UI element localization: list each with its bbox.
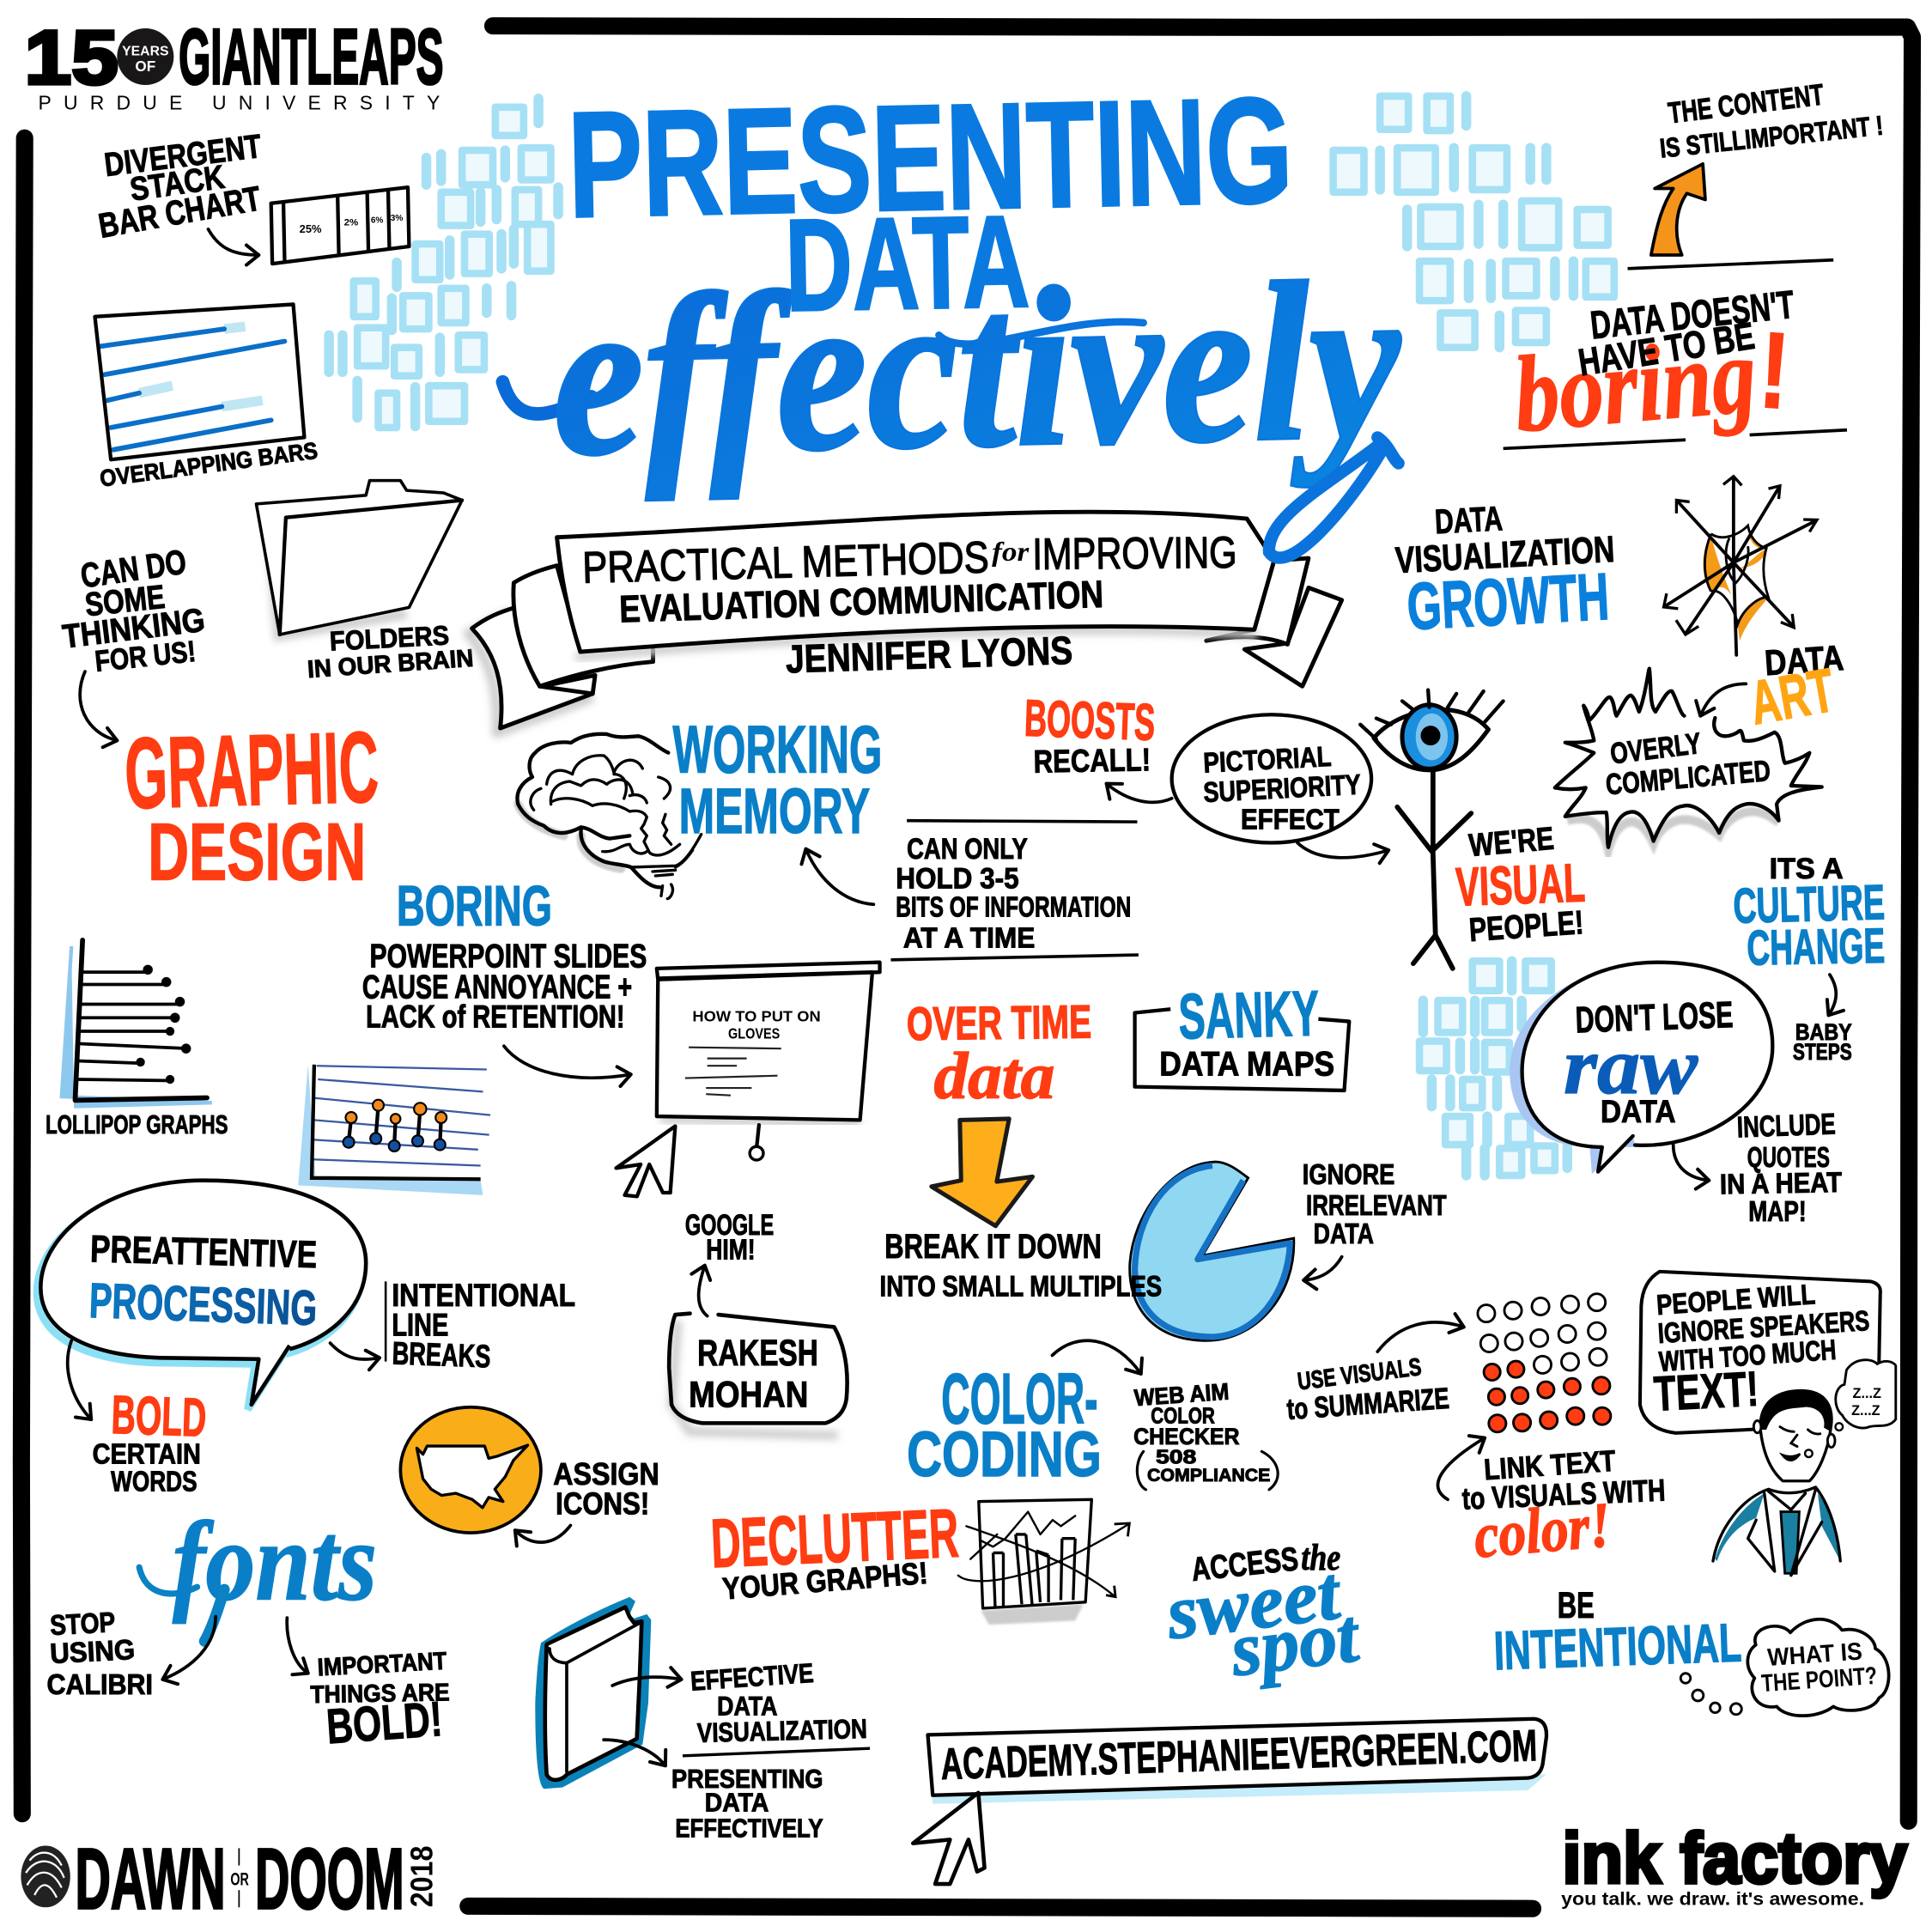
intentional line breaks: INTENTIONAL (392, 1277, 575, 1313)
boring powerpoint slides text (362, 874, 647, 1035)
we're visual people: WE'RE (1467, 820, 1555, 863)
stacked bar chart icon: 2% (344, 218, 358, 228)
pictorial superiority effect bubble: EFFECT (1241, 804, 1340, 835)
people will ignore speakers speech box: IGNORE SPEAKERS (1657, 1304, 1870, 1349)
folders in our brain label: FOLDERS (329, 619, 450, 657)
title: presenting data: DATA (784, 189, 1030, 339)
boring powerpoint slides text: CAUSE ANNOYANCE + (362, 969, 632, 1005)
overly complicated burst: COMPLICATED (1605, 755, 1771, 802)
logo: 150 years of giant leaps (25, 14, 444, 114)
working memory heading: MEMORY (679, 775, 870, 847)
divergent stack bar chart label: STACK (128, 159, 227, 209)
arrow to bold (68, 1340, 91, 1419)
access the sweet spot: sweet (1162, 1551, 1346, 1656)
cluttered graph icon (958, 1499, 1129, 1625)
use visuals to summarize: USE VISUALS (1296, 1353, 1423, 1396)
data doesn't have to be boring: boring (1510, 314, 1760, 455)
data doesn't have to be boring: DATA DOESN'T (1589, 282, 1796, 348)
color-coding heading: COLOR- (941, 1358, 1098, 1438)
baby steps (1793, 1018, 1852, 1065)
important things are bold: BOLD! (325, 1692, 444, 1754)
logo: dawn or doom 2018: DAWN (76, 1832, 226, 1928)
overlapping bars chart (94, 304, 304, 459)
overlapping bars label: OVERLAPPING BARS (98, 437, 319, 492)
book illustration (535, 1597, 651, 1789)
ribbon banner: EVALUATION COMMUNICATION (619, 574, 1104, 631)
break it down text: BREAK IT DOWN (884, 1227, 1102, 1266)
arrow to recall (1107, 784, 1172, 802)
arrow to calibri (162, 1617, 216, 1680)
overly complicated burst: OVERLY (1608, 727, 1703, 771)
include quotes in a heat map: MAP! (1748, 1195, 1807, 1227)
can only hold 3-5 text block (890, 821, 1139, 960)
book titles: VISUALIZATION (696, 1713, 867, 1748)
access the sweet spot: the (1301, 1538, 1340, 1578)
stop using calibri: USING (49, 1633, 136, 1669)
divergent stack bar chart label (95, 128, 264, 246)
what is the point thought cloud: THE POINT? (1760, 1662, 1878, 1698)
culture change (1733, 853, 1886, 976)
arrow to important things (287, 1618, 308, 1674)
web aim color checker: CHECKER (1133, 1423, 1240, 1449)
working memory heading (672, 714, 882, 847)
google him: HIM! (706, 1234, 756, 1266)
book titles: PRESENTING (671, 1765, 823, 1794)
data visualization growth: GROWTH (1406, 560, 1611, 644)
dot grid (1478, 1294, 1611, 1432)
overly complicated burst (1555, 669, 1822, 849)
use visuals to summarize: to SUMMARIZE (1285, 1382, 1450, 1426)
declutter your graphs: DECLUTTER (709, 1495, 960, 1583)
book titles: EFFECTIVE (690, 1657, 815, 1697)
can do some thinking for us (60, 543, 207, 678)
boosts recall: RECALL! (1033, 741, 1151, 780)
snoring thought cloud (1835, 1360, 1896, 1431)
boosts recall (1024, 689, 1156, 780)
link text to visuals with color (1461, 1445, 1666, 1572)
web aim color checker: WEB AIM (1133, 1378, 1230, 1411)
link text to visuals with color: LINK TEXT (1483, 1445, 1617, 1486)
lollipop graph (62, 940, 212, 1107)
arrow to usa icon (515, 1525, 570, 1542)
orange up arrow (1628, 164, 1833, 269)
pictorial superiority effect bubble: SUPERIORITY (1202, 769, 1362, 808)
website url box (928, 1719, 1546, 1804)
divergent stack bar chart label: BAR CHART (95, 179, 264, 246)
book titles (671, 1657, 870, 1844)
color-coding heading (907, 1358, 1102, 1490)
pictorial superiority effect bubble: PICTORIAL (1202, 740, 1332, 779)
arrow to graphic design (80, 671, 117, 740)
stacked bar chart icon: 25% (300, 222, 322, 235)
title: presenting data: PRESENTING (567, 67, 1294, 250)
logo: dawn or doom 2018: DOOM (255, 1832, 404, 1928)
arrow to working memory (805, 849, 873, 904)
folders in our brain label: IN OUR BRAIN (307, 645, 474, 683)
arrow to slide (504, 1046, 631, 1078)
include quotes in a heat map: INCLUDE (1736, 1108, 1836, 1144)
lollipop graphs label: LOLLIPOP GRAPHS (46, 1111, 228, 1139)
bold certain words: BOLD (111, 1385, 208, 1449)
logo: dawn or doom 2018: 2018 (405, 1846, 440, 1907)
use visuals to summarize (1285, 1353, 1450, 1426)
arrow to stacked bar (209, 229, 258, 255)
access the sweet spot: spot (1225, 1594, 1364, 1693)
important things are bold (310, 1648, 450, 1754)
website url box: ACADEMY.STEPHANIEEVERGREEN.COM (940, 1720, 1538, 1789)
folders in our brain label (307, 619, 474, 683)
can only hold 3-5 text block: AT A TIME (903, 921, 1035, 953)
can do some thinking for us: THINKING (60, 602, 207, 656)
intentional line breaks: LINE (392, 1306, 448, 1342)
arrow to include quotes (1674, 1145, 1709, 1181)
be intentional: INTENTIONAL (1493, 1613, 1742, 1681)
presentation screen with slide: HOW TO PUT ON (692, 1008, 821, 1025)
logo: 150 years of giant leaps: PURDUE UNIVERSITY (38, 92, 440, 114)
cursor pointing at url (913, 1793, 985, 1884)
rakesh mohan box: RAKESH (697, 1333, 818, 1374)
snoring thought cloud: Z...Z (1853, 1386, 1881, 1401)
logo: 150 years of giant leaps: OF (135, 58, 155, 75)
folder icon (256, 481, 462, 635)
preattentive processing speech bubble: PROCESSING (88, 1273, 318, 1336)
baby steps: STEPS (1793, 1038, 1852, 1065)
we're visual people: VISUAL (1455, 853, 1586, 918)
don't lose raw data bubble: DATA (1601, 1093, 1676, 1129)
the content is still important (1658, 79, 1885, 164)
bold certain words: WORDS (111, 1465, 197, 1497)
don't lose raw data bubble: DON'T LOSE (1575, 994, 1734, 1041)
ribbon banner: for (992, 537, 1030, 567)
pie chart (1130, 1162, 1294, 1340)
break it down text: INTO SMALL MULTIPLES (880, 1271, 1162, 1303)
logo: ink factory: ink factory (1563, 1819, 1907, 1899)
people will ignore speakers speech box: TEXT! (1652, 1362, 1760, 1422)
include quotes in a heat map (1720, 1108, 1842, 1227)
preattentive processing speech bubble (37, 1181, 366, 1410)
brain illustration (517, 734, 702, 899)
color-coding heading: CODING (907, 1418, 1102, 1490)
intentional line breaks (386, 1277, 575, 1374)
orange down arrow (932, 1119, 1032, 1226)
arrow to google him (699, 1266, 708, 1316)
speaker name: JENNIFER LYONS (785, 628, 1073, 681)
stop using calibri (47, 1606, 153, 1700)
what is the point thought cloud (1680, 1619, 1889, 1716)
logo: dawn or doom 2018 (21, 1832, 440, 1928)
can only hold 3-5 text block: CAN ONLY (907, 833, 1028, 866)
data art: ART (1745, 656, 1839, 738)
can only hold 3-5 text block: BITS OF INFORMATION (896, 891, 1131, 923)
arrow to web aim (1052, 1340, 1141, 1374)
link text to visuals with color: to VISUALS WITH (1461, 1473, 1666, 1516)
be intentional (1493, 1585, 1742, 1681)
ignore irrelevant data: IGNORE (1303, 1158, 1394, 1190)
declutter your graphs: YOUR GRAPHS! (721, 1556, 929, 1607)
break it down text (880, 1227, 1162, 1303)
logo: 150 years of giant leaps: YEARS (122, 45, 168, 59)
declutter your graphs (709, 1495, 960, 1607)
we're visual people (1455, 820, 1586, 949)
don't lose raw data bubble (1510, 963, 1772, 1174)
web aim color checker: COLOR (1151, 1404, 1215, 1428)
preattentive processing speech bubble: PREATTENTIVE (89, 1228, 318, 1276)
cursor pointing at slide (616, 1127, 675, 1196)
access the sweet spot (1162, 1538, 1364, 1693)
google him (685, 1209, 774, 1266)
ribbon banner: PRACTICAL METHODS (582, 532, 989, 592)
spider web icon (1664, 477, 1817, 655)
title: effectively script: effectively (550, 234, 1405, 503)
can do some thinking for us: CAN DO (78, 543, 189, 595)
logo: 150 years of giant leaps: GIANTLEAPS (179, 14, 444, 101)
stacked bar chart icon (271, 187, 409, 264)
sanky data maps box: DATA MAPS (1159, 1045, 1334, 1084)
divergent stack bar chart label: DIVERGENT (102, 128, 264, 184)
assign icons: ASSIGN (553, 1457, 659, 1492)
people will ignore speakers speech box (1640, 1272, 1880, 1433)
arrow to dot grid (1377, 1322, 1464, 1352)
the content is still important: THE CONTENT (1667, 79, 1826, 130)
presentation screen with slide (657, 963, 880, 1160)
arrow to presenting data effectively (604, 1740, 665, 1765)
arrow to line breaks (331, 1343, 380, 1359)
snoring thought cloud: Z...Z (1851, 1403, 1880, 1419)
boring powerpoint slides text: POWERPOINT SLIDES (369, 938, 647, 975)
rakesh mohan box: MOHAN (689, 1375, 808, 1416)
can do some thinking for us: FOR US! (94, 635, 197, 678)
fonts script heading: fonts (173, 1498, 377, 1625)
what is the point thought cloud: WHAT IS (1766, 1637, 1863, 1672)
logo: dawn or doom 2018: OR (230, 1868, 249, 1889)
logo: ink factory: you talk. we draw. it's awesome. (1561, 1888, 1864, 1909)
arrow to pie (1303, 1257, 1342, 1280)
people will ignore speakers speech box: PEOPLE WILL (1656, 1278, 1816, 1321)
logo: 150 years of giant leaps: 15 (25, 15, 118, 100)
sleeping man illustration (1713, 1391, 1840, 1576)
ignore irrelevant data: DATA (1314, 1218, 1374, 1249)
culture change: ITS A (1770, 853, 1844, 885)
book titles: DATA (705, 1789, 769, 1817)
data doesn't have to be boring: HAVE TO BE (1576, 315, 1758, 385)
boring powerpoint slides text: LACK of RETENTION! (366, 999, 625, 1035)
ribbon banner (468, 512, 1342, 733)
data visualization growth (1394, 499, 1615, 644)
over time data: OVER TIME (907, 995, 1091, 1050)
data doesn't have to be boring: ! (1755, 309, 1794, 432)
assign icons (553, 1457, 659, 1522)
working memory heading: WORKING (672, 714, 882, 787)
dumbbell lollipop chart (298, 1065, 490, 1195)
background binary pattern: left of title (329, 99, 558, 428)
ribbon banner: IMPROVING (1032, 527, 1237, 579)
important things are bold: THINGS ARE (310, 1679, 450, 1709)
rakesh mohan box (669, 1314, 848, 1436)
sanky data maps box (1135, 976, 1349, 1091)
arrow to stick figure (1297, 843, 1388, 858)
sanky data maps box: SANKY (1177, 976, 1320, 1053)
graphic design heading (124, 710, 380, 898)
boring powerpoint slides text: BORING (397, 874, 552, 938)
don't lose raw data bubble: raw (1564, 1022, 1698, 1111)
bold certain words (93, 1385, 208, 1497)
ignore irrelevant data (1303, 1158, 1447, 1249)
important things are bold: IMPORTANT (317, 1648, 447, 1682)
background binary pattern: behind raw data bubble (1419, 961, 1567, 1176)
we're visual people: PEOPLE! (1468, 904, 1585, 949)
fonts script heading (139, 1498, 377, 1641)
ignore irrelevant data: IRRELEVANT (1306, 1189, 1447, 1221)
intentional line breaks: BREAKS (392, 1335, 491, 1374)
arrow from link text (1438, 1438, 1485, 1499)
orange usa icon (400, 1407, 541, 1533)
include quotes in a heat map: IN A HEAT (1720, 1166, 1842, 1200)
can do some thinking for us: SOME (83, 579, 167, 623)
title: presenting data (567, 67, 1294, 339)
include quotes in a heat map: QUOTES (1747, 1141, 1830, 1173)
eye stick figure (1360, 690, 1504, 969)
data visualization growth: VISUALIZATION (1394, 529, 1615, 581)
web aim color checker: COMPLIANCE (1147, 1465, 1270, 1485)
graphic design heading: GRAPHIC (124, 710, 380, 829)
people will ignore speakers speech box: WITH TOO MUCH (1658, 1334, 1837, 1377)
book titles: EFFECTIVELY (675, 1815, 823, 1844)
stacked bar chart icon: 6% (371, 216, 383, 226)
arrow to effective data visualization (612, 1677, 682, 1686)
book titles: DATA (717, 1690, 777, 1721)
stop using calibri: STOP (49, 1606, 116, 1641)
arrow to baby steps (1828, 975, 1836, 1015)
graphic design heading: DESIGN (148, 807, 366, 898)
data art: DATA (1764, 637, 1845, 683)
presentation screen with slide: GLOVES (728, 1025, 780, 1042)
pictorial superiority effect bubble (1172, 714, 1371, 843)
bold certain words: CERTAIN (93, 1438, 201, 1470)
assign icons: ICONS! (556, 1487, 649, 1522)
boosts recall: BOOSTS (1024, 689, 1156, 751)
baby steps: BABY (1795, 1018, 1852, 1045)
stacked bar chart icon: 3% (391, 214, 403, 223)
arrow to burst (1700, 683, 1746, 716)
can only hold 3-5 text block: HOLD 3-5 (896, 863, 1019, 896)
be intentional: BE (1558, 1585, 1595, 1626)
background binary pattern: right of title (1334, 96, 1614, 348)
google him: GOOGLE (685, 1209, 774, 1242)
access the sweet spot: ACCESS (1189, 1540, 1300, 1589)
data visualization growth: DATA (1434, 499, 1504, 541)
over time data (907, 995, 1091, 1113)
over time data: data (934, 1039, 1054, 1113)
web aim color checker: 508 (1156, 1446, 1197, 1468)
data art (1745, 637, 1845, 738)
stop using calibri: CALIBRI (47, 1668, 153, 1700)
link text to visuals with color: color! (1471, 1490, 1613, 1572)
web aim color checker (1133, 1378, 1278, 1490)
